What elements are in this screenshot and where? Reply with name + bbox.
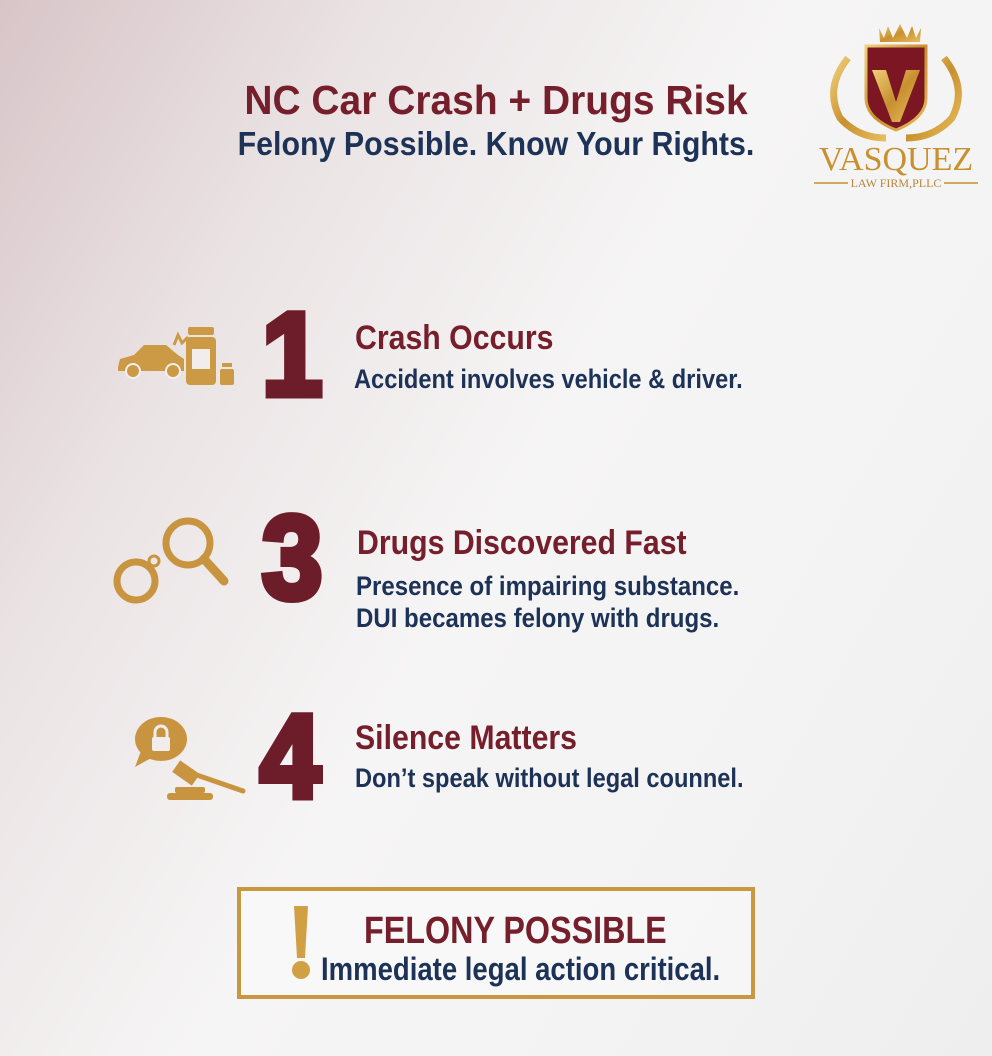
title: NC Car Crash + Drugs Risk: [244, 77, 748, 123]
step 1 heading: Crash Occurs: [355, 319, 553, 357]
callout heading: FELONY POSSIBLE: [364, 910, 667, 952]
logo: VASQUEZ: [819, 141, 973, 178]
icon: car crash and pills: [118, 327, 234, 385]
number 3: 3: [262, 492, 322, 624]
callout text: Immediate legal action critical.: [321, 951, 720, 987]
number 4: 4: [260, 691, 320, 823]
step 4 description: Don’t speak without legal counnel.: [355, 763, 744, 793]
subtitle: Felony Possible. Know Your Rights.: [238, 125, 754, 162]
callout box: [237, 887, 755, 999]
logo: [814, 24, 978, 190]
step 4 heading: Silence Matters: [355, 719, 577, 757]
step 1 text: [354, 319, 743, 394]
step 3 description: DUI becames felony with drugs.: [356, 603, 719, 633]
step 3 heading: Drugs Discovered Fast: [357, 524, 687, 562]
step 1 description: Accident involves vehicle & driver.: [354, 364, 743, 394]
icon: handcuffs and magnifier: [114, 518, 228, 604]
step 3 description: Presence of impairing substance.: [356, 571, 739, 601]
step 4 text: [355, 719, 744, 793]
step 3 description: [356, 571, 739, 633]
icon: speech lock and gavel: [135, 717, 246, 800]
logo: LAW FIRM,PLLC: [851, 176, 941, 190]
number 1: 1: [262, 289, 322, 421]
icon: exclamation: [292, 906, 310, 979]
step 3 text: [356, 524, 739, 633]
